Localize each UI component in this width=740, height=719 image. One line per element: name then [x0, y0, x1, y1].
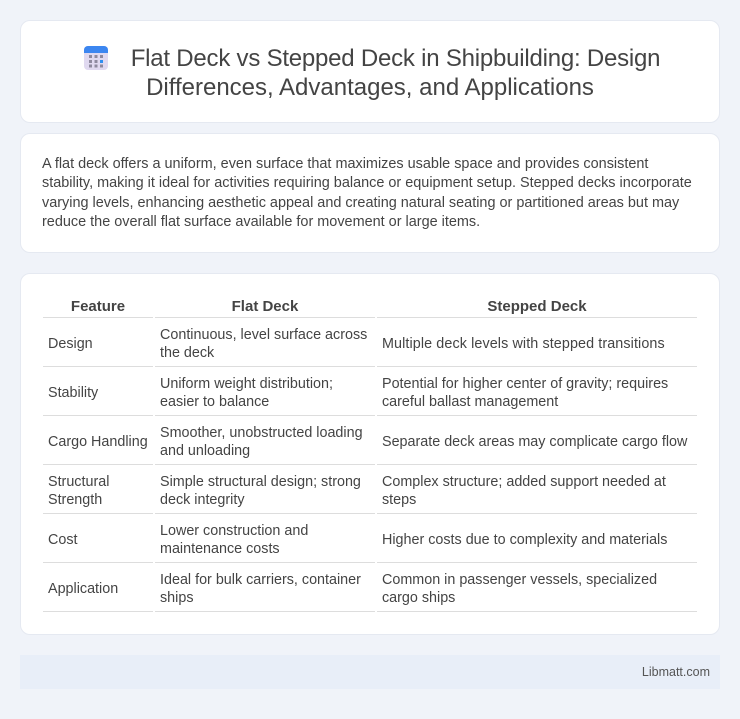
row: Application: Ideal for bulk carriers, container — [160, 572, 361, 588]
text block: introduction: stability, making it ideal for activities requiring balance or equipment setup. Stepped decks incorporate — [42, 175, 692, 191]
row: Structural Strength: steps — [382, 492, 416, 508]
row: Stability: Uniform weight distribution; — [160, 376, 333, 392]
row: Design: Design — [48, 336, 93, 352]
row: Cost: Cost — [48, 532, 78, 548]
row: Cost — [48, 523, 667, 557]
row: Structural Strength: deck integrity — [160, 492, 245, 508]
icon: calendar — [84, 46, 108, 70]
heading: title: Flat Deck vs Stepped Deck in Shipbuilding: Design — [131, 45, 660, 72]
row: Structural Strength: Simple structural design; strong — [160, 474, 361, 490]
header: Stepped Deck: Stepped Deck — [487, 298, 587, 315]
row: Structural Strength — [48, 474, 666, 508]
row: Cost: Lower construction and — [160, 523, 308, 539]
heading: title — [131, 45, 660, 101]
row: Stability: Potential for higher center of gravity; requires — [382, 376, 668, 392]
table: comparison — [43, 298, 697, 612]
footer bar — [20, 655, 720, 689]
row: Structural Strength: Structural — [48, 474, 109, 490]
row: Application: cargo ships — [382, 590, 455, 606]
row: Cargo Handling: Smoother, unobstructed loading — [160, 425, 363, 441]
row: Stability: easier to balance — [160, 394, 269, 410]
row: Design: Multiple deck levels with stepped transitions — [382, 336, 665, 352]
row: Design — [48, 327, 665, 361]
row: Cargo Handling: Cargo Handling — [48, 434, 148, 450]
row: Cargo Handling: Separate deck areas may complicate cargo flow — [382, 434, 687, 450]
row: Structural Strength: Complex structure; added support needed at — [382, 474, 666, 490]
text block: introduction — [42, 156, 692, 230]
row: Application — [48, 572, 657, 606]
row: Design: the deck — [160, 345, 214, 361]
row: Stability: careful ballast management — [382, 394, 558, 410]
row: Application: Common in passenger vessels, specialized — [382, 572, 657, 588]
text block: introduction: reduce the overall flat surface available for movement or large items. — [42, 214, 480, 230]
panel: comparison table card — [20, 273, 720, 635]
row: Application: Application — [48, 581, 118, 597]
panel: title card — [20, 20, 720, 123]
row: Application: ships — [160, 590, 194, 606]
row: Stability — [48, 376, 668, 410]
text block: introduction: varying levels, enhancing aesthetic appeal and creating natural seating or partitioned areas but may — [42, 195, 679, 211]
footer: source: Libmatt.com — [642, 665, 710, 679]
row: Cost: maintenance costs — [160, 541, 280, 557]
header: Flat Deck: Flat Deck — [232, 298, 298, 315]
row: Structural Strength: Strength — [48, 492, 102, 508]
heading: title: Differences, Advantages, and Applications — [146, 74, 594, 101]
text block: introduction: A flat deck offers a uniform, even surface that maximizes usable space and provides consistent — [42, 156, 648, 172]
row: Design: Continuous, level surface across — [160, 327, 367, 343]
panel: intro card — [20, 133, 720, 253]
header: Feature: Feature — [71, 298, 125, 315]
row: Cost: Higher costs due to complexity and materials — [382, 532, 667, 548]
row: Stability: Stability — [48, 385, 98, 401]
row: Cargo Handling — [48, 425, 688, 459]
row: Cargo Handling: and unloading — [160, 443, 250, 459]
